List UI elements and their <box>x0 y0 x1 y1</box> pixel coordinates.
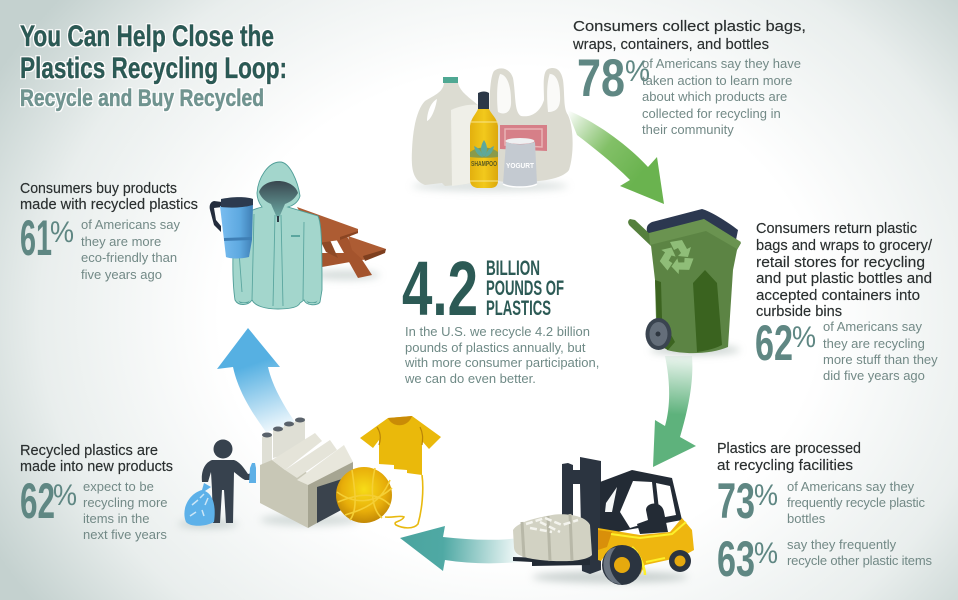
text: 78% detail: of Americans say they have <box>642 56 801 71</box>
text: 62% expect detail: recycling more <box>83 495 168 510</box>
text: 62% expect detail: expect to be <box>83 479 154 494</box>
stat: 63%: 63 <box>717 531 755 587</box>
panel: return plastics <box>628 209 941 383</box>
heading: buy: Consumers buy products <box>20 181 177 197</box>
icon: yellow t-shirt <box>360 416 441 475</box>
stat: 62% recycling more: % <box>792 321 816 354</box>
text: 62% detail: of Americans say <box>823 319 922 334</box>
title: You Can Help Close the <box>20 20 274 53</box>
text: 63% detail: say they frequently <box>787 537 897 552</box>
text: 61% detail: five years ago <box>81 267 162 282</box>
title: Recycle and Buy Recycled <box>20 85 264 112</box>
heading: return: curbside bins <box>756 304 842 320</box>
text: 73% detail: frequently recycle plastic <box>787 495 926 510</box>
text: 62% expect detail: next five years <box>83 527 167 542</box>
icon: picnic table <box>297 207 386 280</box>
title <box>20 20 287 112</box>
center text: with more consumer participation, <box>404 355 599 370</box>
icon: forklift with bale <box>513 457 694 585</box>
text: 62% detail: more stuff than they <box>823 352 938 367</box>
text: 62% detail: they are recycling <box>823 336 925 351</box>
arrow: facility to factory <box>400 526 520 571</box>
heading: collect: wraps, containers, and bottles <box>572 37 769 53</box>
icon: travel mug <box>210 197 253 258</box>
heading: return: retail stores for recycling <box>756 255 925 271</box>
heading: return: Consumers return plastic <box>756 221 917 237</box>
heading: collect <box>572 19 806 53</box>
text: 62% expect detail: items in the <box>83 511 149 526</box>
billion pounds label: POUNDS OF <box>486 277 564 300</box>
panel: processing <box>513 441 932 587</box>
heading: new products: made into new products <box>20 459 173 475</box>
heading: new products: Recycled plastics are <box>20 443 158 459</box>
text: 63% detail: recycle other plastic items <box>787 553 932 568</box>
heading: buy <box>20 181 198 213</box>
text: 78% detail: collected for recycling in <box>642 106 781 121</box>
icon: factory <box>260 418 360 528</box>
text: 78% detail: their community <box>642 122 734 137</box>
text: 62% detail: did five years ago <box>823 368 925 383</box>
panel: collect plastics <box>412 19 806 191</box>
stat: 62% expect: % <box>53 479 77 512</box>
center text: we can do even better. <box>404 371 536 386</box>
icon: yarn ball <box>336 467 423 528</box>
heading: buy: made with recycled plastics <box>20 197 198 213</box>
arrow: factory to products <box>217 328 297 432</box>
stat: 78%: % <box>625 55 650 88</box>
text: 61% detail: of Americans say <box>81 217 180 232</box>
text: 73% detail: bottles <box>787 511 826 526</box>
icon: hoodie <box>233 162 322 309</box>
center text: pounds of plastics annually, but <box>405 340 586 355</box>
icon: recycling symbol <box>655 240 695 278</box>
stat: 63%: % <box>754 537 778 570</box>
billion pounds label <box>486 257 564 320</box>
icon: plastic jug, bag, shampoo and yogurt <box>412 68 573 191</box>
center text: In the U.S. we recycle 4.2 billion <box>405 324 590 339</box>
heading: return <box>756 221 933 320</box>
heading: processed: at recycling facilities <box>717 458 853 474</box>
heading: processed: Plastics are processed <box>717 441 861 457</box>
stat: 73%: 73 <box>717 473 755 529</box>
icon: plastic jug, bag, shampoo and yogurt: SHAMPOO <box>471 161 497 168</box>
arrow: bin to facility <box>653 356 696 467</box>
heading: return: and put plastic bottles and <box>756 271 932 287</box>
title: Plastics Recycling Loop: <box>20 52 287 85</box>
text: 61% detail: eco-friendly than <box>81 250 177 265</box>
stat: 73%: % <box>754 479 778 512</box>
stat: 61%: % <box>50 216 74 249</box>
arrow: collection to bin <box>567 110 664 204</box>
icon: plastic jug, bag, shampoo and yogurt: YOGURT <box>506 161 534 170</box>
billion pounds label: PLASTICS <box>486 297 551 320</box>
heading: return: accepted containers into <box>756 288 920 304</box>
icon: recycling bin <box>628 209 741 355</box>
text: 73% detail: of Americans say they <box>787 479 915 494</box>
stat: 61%: 61 <box>20 210 52 266</box>
billion pounds label: BILLION <box>486 257 540 280</box>
heading: new products <box>20 443 173 475</box>
icon: person with recycling bag <box>178 440 256 528</box>
panel: buy recycled <box>20 162 386 309</box>
big number: 4.2: 4.2 <box>402 246 478 332</box>
text: 78% detail: taken action to learn more <box>642 73 792 88</box>
center statistic <box>402 246 603 386</box>
panel: new products <box>20 416 441 542</box>
heading: return: bags and wraps to grocery/ <box>756 238 933 254</box>
text: 61% detail: they are more <box>81 234 161 249</box>
heading: collect: Consumers collect plastic bags, <box>573 19 806 35</box>
heading: processed <box>717 441 861 474</box>
stat: 62% expect: 62 <box>20 473 55 529</box>
stat: 62% recycling more: 62 <box>755 315 793 371</box>
text: 78% detail: about which products are <box>642 89 787 104</box>
stat: 78%: 78 <box>577 49 625 108</box>
